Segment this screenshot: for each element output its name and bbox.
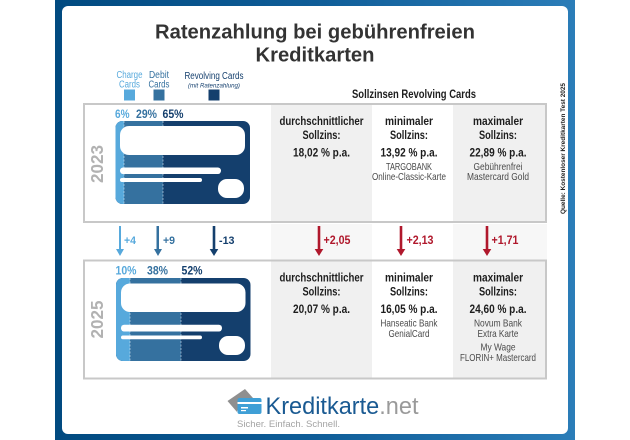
legend: charge cards: Cards xyxy=(119,80,140,90)
arrow: average +2,05 xyxy=(315,226,351,256)
arrow: debit +9 xyxy=(154,226,175,256)
column: maximaler 2025: maximaler xyxy=(473,270,523,284)
column: durchschnittlicher 2023: Sollzins: xyxy=(302,128,340,142)
percentages: 38% xyxy=(147,266,168,278)
legend xyxy=(116,70,244,100)
panel: 2025 xyxy=(84,260,546,378)
legend: debit cards xyxy=(148,70,170,100)
title xyxy=(155,20,475,66)
column: minimaler 2025 xyxy=(380,270,438,340)
percentages: 52% xyxy=(182,266,202,278)
logo xyxy=(228,389,419,430)
column: durchschnittlicher 2023: 18,02 % p.a. xyxy=(293,146,350,160)
percentages: 6% xyxy=(115,109,130,121)
legend: revolving cards: Revolving Cards xyxy=(184,71,244,82)
column: durchschnittlicher 2025: Sollzins: xyxy=(302,284,340,298)
percentages: 29% xyxy=(136,109,157,121)
arrow: minimum +2,13 xyxy=(397,226,434,256)
column: durchschnittlicher 2025: durchschnittlicher xyxy=(280,270,364,284)
arrow: debit +9: +9 xyxy=(163,235,175,247)
column: minimaler 2025: minimaler xyxy=(385,270,433,284)
credit card 2025 xyxy=(116,278,250,361)
column: maximaler 2023: maximaler xyxy=(473,114,523,128)
column: minimaler 2023: Online-Classic-Karte xyxy=(372,171,446,183)
percentages: 10% xyxy=(116,266,136,278)
arrow: maximum +1,71: +1,71 xyxy=(492,233,519,247)
arrow: charge +4 xyxy=(116,226,137,256)
column: durchschnittlicher 2023: durchschnittlicher xyxy=(280,114,364,128)
wordmark: Kreditkarte.net xyxy=(266,393,419,420)
source note: Quelle: Kostenloser Kreditkarten Test 2025 xyxy=(561,82,567,214)
column: maximaler 2025: Novum Bank xyxy=(474,318,523,330)
column: maximaler 2025: 24,60 % p.a. xyxy=(470,302,526,316)
column: minimaler 2023 xyxy=(372,114,446,183)
column: maximaler 2023: 22,89 % p.a. xyxy=(470,146,526,160)
column: durchschnittlicher 2025: 20,07 % p.a. xyxy=(293,302,350,316)
column: minimaler 2023: TARGOBANK xyxy=(386,161,432,173)
column: minimaler 2025: GenialCard xyxy=(388,328,430,340)
legend: revolving cards: (mit Ratenzahlung) xyxy=(188,84,240,90)
column: maximaler 2025: My Wage xyxy=(480,342,516,354)
year label 2025: 2025 xyxy=(87,300,107,338)
percentages xyxy=(116,266,202,278)
credit card 2023 xyxy=(116,121,250,204)
column shading between panels xyxy=(271,224,547,260)
title: Ratenzahlung bei gebührenfreien xyxy=(155,20,475,44)
arrow: charge +4: +4 xyxy=(124,235,137,247)
arrow: average +2,05: +2,05 xyxy=(324,233,351,247)
panel border xyxy=(84,260,546,378)
title: Kreditkarten xyxy=(256,44,374,66)
white inner panel xyxy=(62,6,568,434)
arrow: minimum +2,13: +2,13 xyxy=(406,233,434,247)
panel shading xyxy=(271,104,546,222)
tagline: Sicher. Einfach. Schnell. xyxy=(237,419,340,430)
column: maximaler 2023: Mastercard Gold xyxy=(467,171,529,183)
arrow: revolving -13: -13 xyxy=(219,235,234,247)
panel border xyxy=(84,104,546,222)
column: minimaler 2025: Sollzins: xyxy=(390,284,428,298)
column: minimaler 2023: minimaler xyxy=(385,114,433,128)
arrow: revolving -13 xyxy=(210,226,234,256)
legend: debit cards: Debit xyxy=(149,70,169,81)
heading: Sollzinsen Revolving Cards: Sollzinsen Revolving Cards xyxy=(352,87,476,101)
column: maximaler 2025: FLORIN+ Mastercard xyxy=(460,352,536,364)
column: durchschnittlicher 2023 xyxy=(280,114,364,160)
column: minimaler 2025: 16,05 % p.a. xyxy=(380,302,438,316)
column: maximaler 2025: Sollzins: xyxy=(479,284,517,298)
column: minimaler 2023: Sollzins: xyxy=(390,128,428,142)
icon: cards xyxy=(228,389,262,414)
panel: 2023 xyxy=(84,104,546,222)
year label 2023: 2023 xyxy=(87,145,107,183)
column: minimaler 2025: Hanseatic Bank xyxy=(380,318,438,330)
arrow: maximum +1,71 xyxy=(483,226,519,256)
legend: revolving cards xyxy=(184,71,244,100)
legend: debit cards: Cards xyxy=(148,80,170,90)
column: minimaler 2023: 13,92 % p.a. xyxy=(380,146,438,160)
column: maximaler 2023: Sollzins: xyxy=(479,128,517,142)
column: maximaler 2025 xyxy=(460,270,536,364)
legend: charge cards: Charge xyxy=(116,70,143,81)
column: maximaler 2025: Extra Karte xyxy=(478,328,519,340)
percentages: 65% xyxy=(162,109,184,121)
panel shading xyxy=(271,261,546,378)
column: durchschnittlicher 2025 xyxy=(280,270,364,316)
column: maximaler 2023 xyxy=(467,114,529,183)
percentages xyxy=(115,109,184,121)
column: maximaler 2023: Gebührenfrei xyxy=(474,161,522,173)
legend: charge cards xyxy=(116,70,143,100)
